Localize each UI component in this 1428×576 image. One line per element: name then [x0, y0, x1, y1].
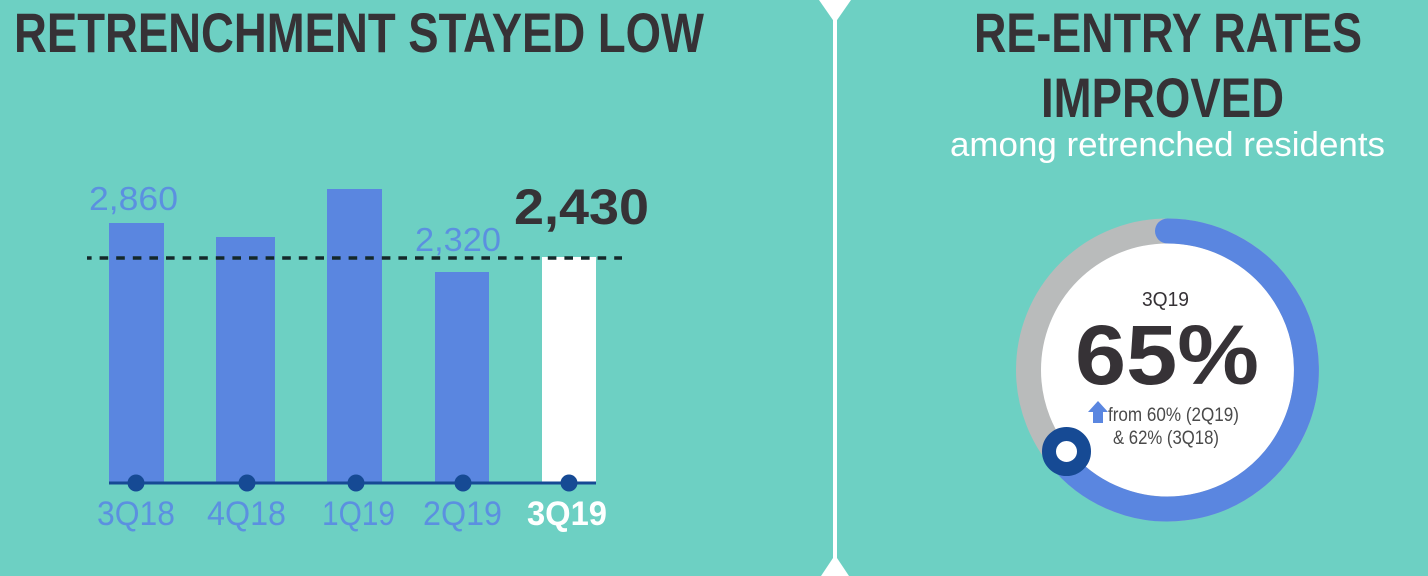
axis dot: 4Q18: [238, 474, 256, 492]
value label: 2,430: 2,430: [514, 179, 649, 235]
axis label: 1Q19: 1Q19: [322, 495, 395, 533]
divider with triangles: [819, 0, 851, 576]
axis dot: 1Q19: [348, 474, 364, 492]
axis label: 2Q19: 2Q19: [423, 495, 502, 533]
panel: retrenchment: [14, 2, 704, 533]
axis dot: 2Q19: [454, 474, 472, 492]
donut value: 65%: 65%: [1075, 308, 1259, 402]
bar: 3Q19: [542, 257, 596, 483]
comparison note: from 60% (2Q19): [1108, 405, 1239, 426]
axis dot: 3Q19: [560, 474, 578, 492]
bar: 4Q18: [216, 237, 275, 483]
axis label: 4Q18: 4Q18: [207, 495, 286, 533]
bar: 2Q19: [435, 272, 489, 483]
bar: 1Q19: [327, 189, 382, 483]
axis label: 3Q19: 3Q19: [527, 495, 607, 533]
donut chart: 65%: [1028, 231, 1306, 509]
axis label: 3Q18: 3Q18: [97, 495, 175, 533]
comparison note: & 62% (3Q18): [1113, 428, 1219, 449]
value label: 2,320: 2,320: [415, 221, 501, 258]
donut end marker: [1049, 434, 1084, 469]
axis dot: 3Q18: [128, 474, 144, 492]
bar: 3Q18: [109, 223, 164, 483]
donut value arc: [1060, 231, 1306, 509]
comparison note: [1108, 405, 1239, 449]
value label: 2,860: 2,860: [89, 180, 178, 217]
subheading: among retrenched residents: [950, 126, 1385, 164]
bar chart: quarterly retrenchments: [87, 179, 649, 533]
donut label: 3Q19: 3Q19: [1142, 289, 1189, 311]
heading: retrenchment stayed low: RETRENCHMENT STAYED LOW: [14, 2, 704, 64]
heading: re-entry rates improved: IMPROVED: [1041, 67, 1284, 129]
panel: re-entry rates: [950, 2, 1385, 509]
heading: re-entry rates improved: [974, 2, 1362, 129]
icon: up arrow: [1088, 401, 1108, 423]
